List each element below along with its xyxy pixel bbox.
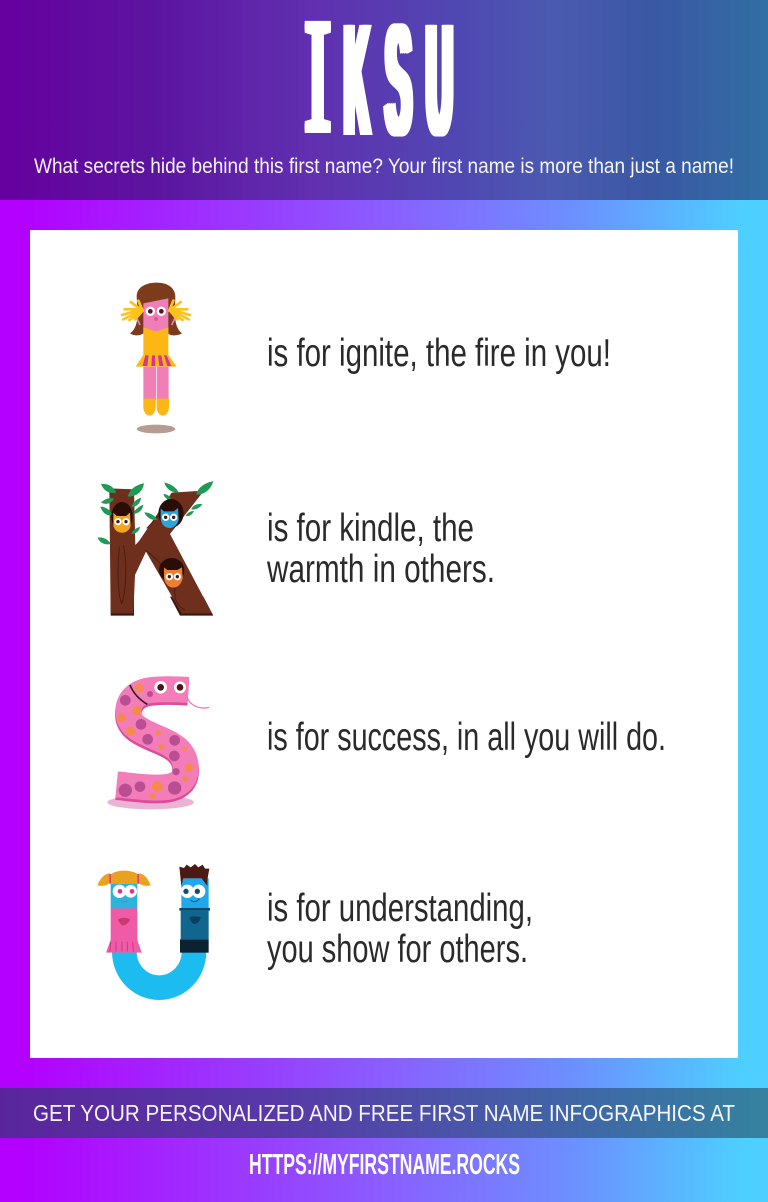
owl holes — [111, 502, 133, 531]
text: K lines — [266, 507, 495, 591]
text: I line: is for ignite, the fire in you! — [267, 332, 611, 375]
footer call-to-action band — [0, 1088, 768, 1138]
text: U lines: you show for others. — [267, 928, 528, 971]
white content panel — [30, 230, 738, 1058]
header band — [0, 0, 768, 200]
text: K lines: warmth in others. — [266, 548, 495, 591]
text: U lines: is for understanding, — [267, 887, 533, 930]
icon: letter I cheerleader girl — [122, 283, 190, 433]
leaves — [98, 481, 213, 544]
icon: letter K tree with owls — [98, 481, 213, 616]
title — [302, 0, 454, 169]
text: K lines: is for kindle, the — [267, 507, 474, 550]
owls — [113, 508, 183, 588]
footer url: HTTPS://MYFIRSTNAME.ROCKS — [249, 1149, 520, 1181]
text: U lines — [267, 887, 533, 971]
icon: letter S snake — [107, 681, 209, 809]
icon: letter U two characters — [97, 864, 210, 988]
